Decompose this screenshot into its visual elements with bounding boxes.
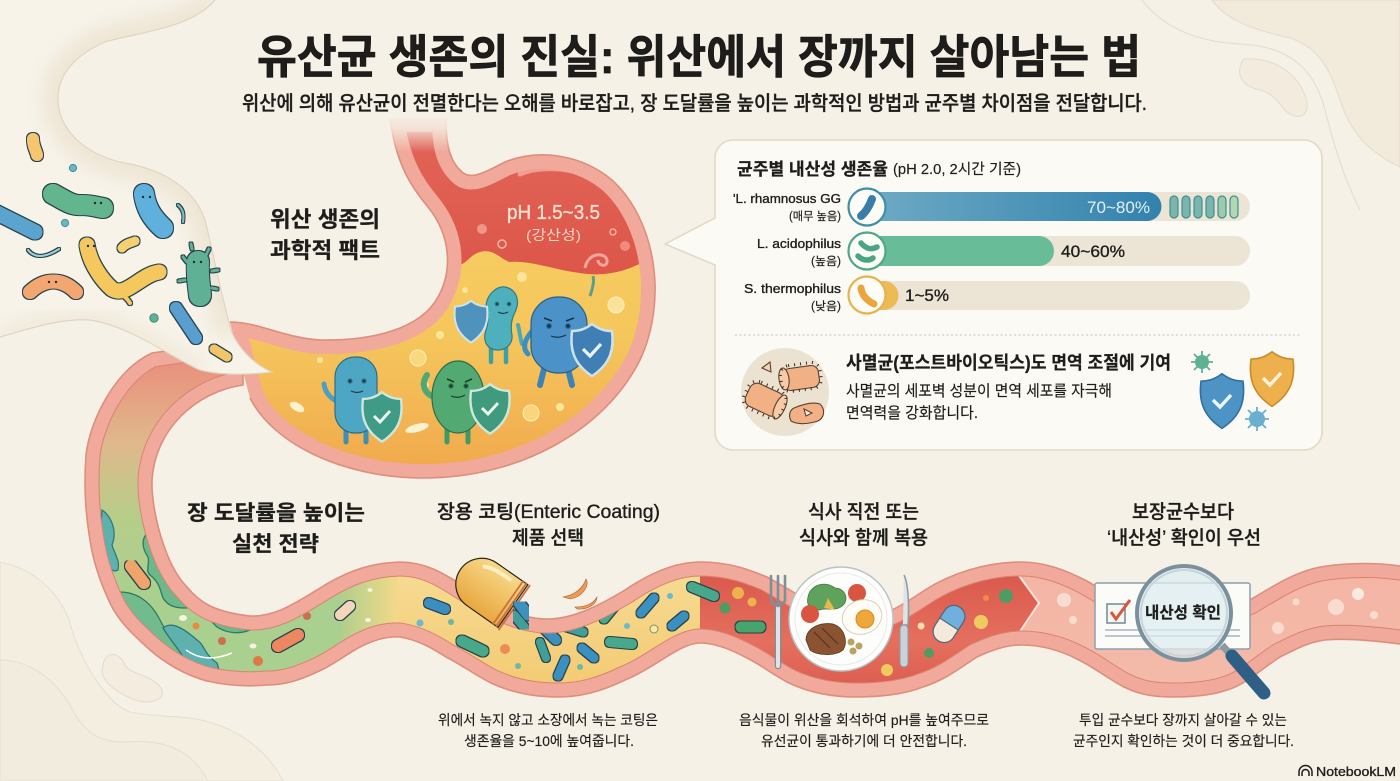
stomach section label: pH: (강산성) bbox=[526, 227, 581, 243]
icon: immune shields bbox=[1191, 351, 1294, 431]
fork bbox=[771, 576, 785, 666]
bar: L. acidophilus: (높음) bbox=[811, 255, 841, 268]
heading: stomach survival facts: 위산 생존의 bbox=[270, 207, 380, 232]
icon: meal plate with cutlery bbox=[771, 567, 909, 671]
bar chart bbox=[733, 188, 1250, 314]
bar: S. thermophilus: 1~5% bbox=[905, 286, 949, 305]
icon: enteric capsule bbox=[444, 547, 597, 630]
tip 3 heading: ‘내산성’ 확인이 우선 bbox=[1107, 527, 1261, 549]
bar: L. rhamnosus GG: 70~80% bbox=[1087, 198, 1150, 217]
bar: S. thermophilus: (낮음) bbox=[811, 300, 841, 313]
stomach section label: pH: pH 1.5~3.5 bbox=[507, 202, 600, 224]
tip 2 body: 유선균이 통과하기에 더 안전합니다. bbox=[761, 733, 967, 749]
heading: stomach survival facts: 과학적 팩트 bbox=[270, 238, 380, 263]
tip 1 heading bbox=[437, 501, 660, 549]
lumen bacteria bbox=[131, 566, 760, 676]
tip 1 body: 생존율을 5~10에 높여줍니다. bbox=[464, 733, 634, 749]
tip 3 body bbox=[1073, 712, 1294, 749]
tip 1 body bbox=[438, 712, 658, 749]
chart heading: 균주별 내산성 생존율 bbox=[737, 160, 888, 179]
lumen particles bbox=[179, 587, 1378, 676]
bar: S. thermophilus: S. thermophilus bbox=[744, 281, 842, 296]
green mucosa folds bbox=[101, 509, 250, 669]
tip 2 body bbox=[739, 712, 989, 749]
character: big blue bacterium with shield bbox=[525, 276, 613, 385]
NotebookLM logo: NotebookLM bbox=[1316, 764, 1396, 779]
chart heading bbox=[737, 160, 1021, 179]
title: 유산균 생존의 진실: 위산에서 장까지 살아남는 법 bbox=[257, 31, 1141, 83]
icon: broken postbiotic cells bbox=[740, 348, 829, 436]
tip 1 heading: 장용 코팅(Enteric Coating) bbox=[437, 501, 660, 523]
tip 3 body: 균주인지 확인하는 것이 더 중요합니다. bbox=[1073, 733, 1294, 749]
bar: L. rhamnosus GG: 'L. rhamnosus GG bbox=[733, 191, 841, 206]
icon: document under magnifier bbox=[1095, 566, 1264, 693]
tip 1 body: 위에서 녹지 않고 소장에서 녹는 코팅은 bbox=[438, 712, 658, 728]
panel: acid survival rates bbox=[665, 140, 1322, 450]
bar: L. acidophilus: 40~60% bbox=[1061, 242, 1125, 261]
tip 2 heading bbox=[799, 501, 928, 549]
heading: practical strategies bbox=[187, 502, 365, 556]
stomach bbox=[230, 112, 656, 479]
character: small teal bacterium with shield bbox=[455, 287, 522, 362]
heading: stomach survival facts bbox=[270, 207, 380, 263]
bar: L. rhamnosus GG: (매무 높음) bbox=[789, 210, 841, 223]
funnel of bacteria bbox=[0, 0, 272, 374]
tip 3 heading bbox=[1107, 501, 1261, 549]
postbiotics text: 사멸균의 세포벽 성분이 면역 세포를 자극해 bbox=[846, 382, 1112, 400]
bar: L. acidophilus bbox=[757, 232, 1250, 270]
heading: practical strategies: 장 도달률을 높이는 bbox=[187, 502, 365, 525]
bar: L. acidophilus: L. acidophilus bbox=[757, 236, 842, 251]
icon: document under magnifier: 내산성 확인 bbox=[1145, 604, 1221, 622]
postbiotics text: 면역력을 강화합니다. bbox=[846, 404, 978, 422]
chart heading: (pH 2.0, 2시간 기준) bbox=[893, 161, 1021, 178]
icon: pill bbox=[929, 601, 969, 647]
tip 3 heading: 보장균수보다 bbox=[1132, 501, 1234, 523]
tip 2 heading: 식사 직전 또는 bbox=[808, 501, 919, 523]
character: green bacterium with shield bbox=[424, 361, 510, 442]
postbiotics text bbox=[846, 353, 1171, 422]
stomach section label: pH bbox=[507, 202, 600, 243]
heading: practical strategies: 실천 전략 bbox=[232, 533, 319, 556]
bar: L. rhamnosus GG bbox=[733, 188, 1250, 226]
tip 3 body: 투입 균수보다 장까지 살아갈 수 있는 bbox=[1079, 712, 1287, 728]
intestine bbox=[84, 350, 1400, 698]
knife bbox=[900, 575, 909, 667]
tip 2 heading: 식사와 함께 복용 bbox=[799, 527, 928, 549]
bacteria group bbox=[0, 139, 227, 357]
character: blue bacterium with green shield bbox=[324, 357, 402, 442]
tip 1 heading: 제품 선택 bbox=[512, 527, 584, 549]
tip 2 body: 음식물이 위산을 회석하여 pH를 높여주므로 bbox=[739, 712, 989, 728]
subtitle: 위산에 의해 유산균이 전멸한다는 오해를 바로잡고, 장 도달률을 높이는 과학적인 방법과 균주별 차이점을 전달합니다. bbox=[242, 92, 1147, 115]
bar: S. thermophilus bbox=[744, 276, 1250, 314]
postbiotics text: 사멸균(포스트바이오틱스)도 면역 조절에 기여 bbox=[846, 353, 1171, 373]
